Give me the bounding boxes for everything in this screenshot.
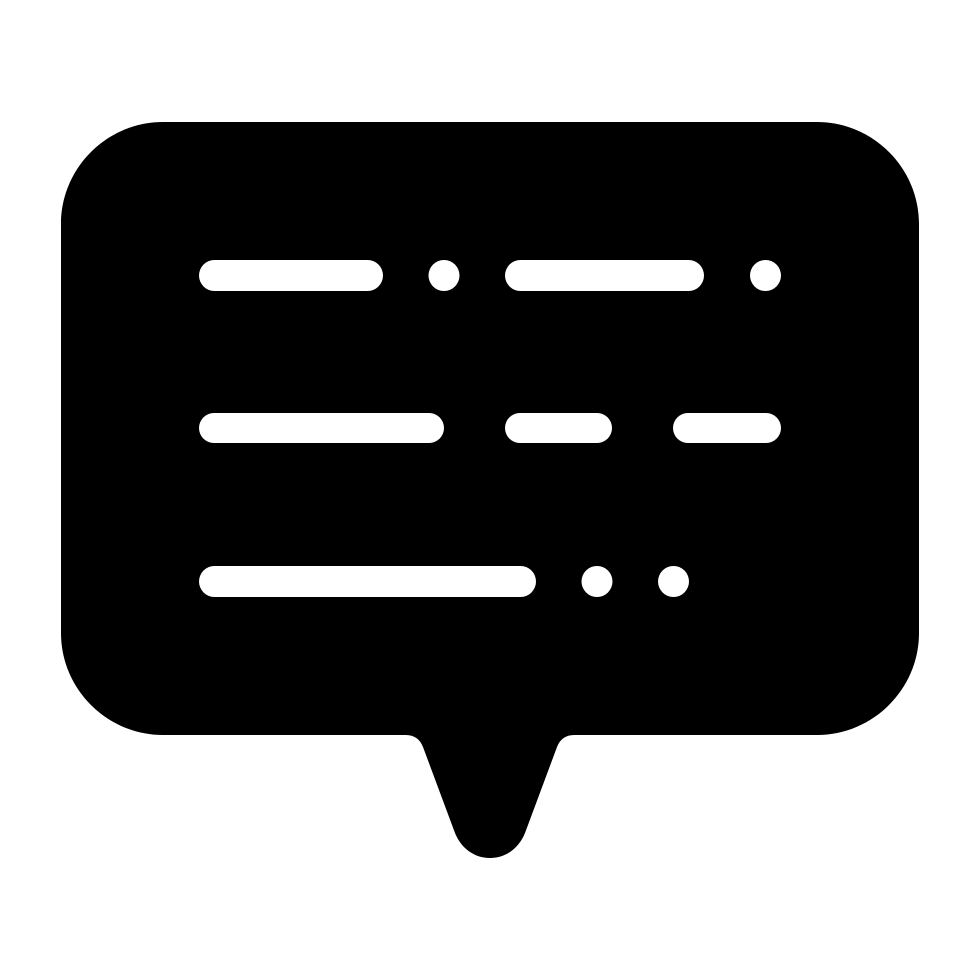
text lines inside bubble	[199, 260, 781, 597]
speech bubble body with tail	[61, 122, 919, 858]
